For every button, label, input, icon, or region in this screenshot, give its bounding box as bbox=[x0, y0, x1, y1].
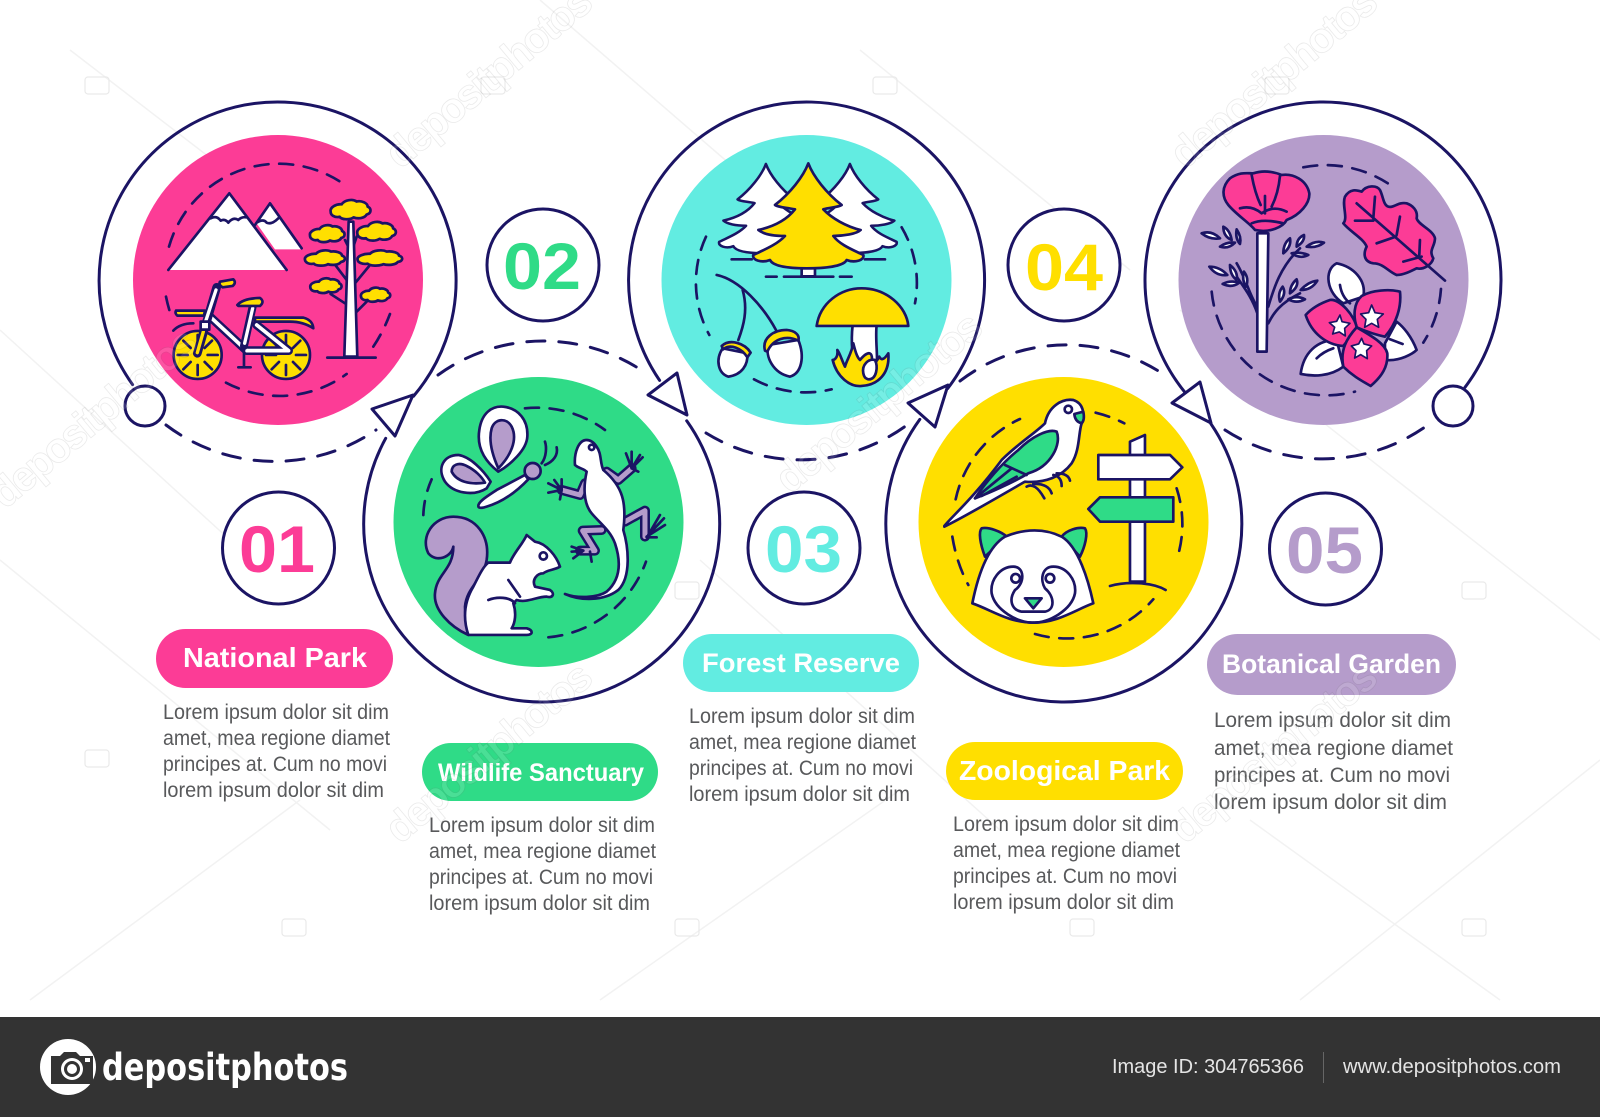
watermark: depositphotos bbox=[376, 652, 601, 852]
footer site url: www.depositphotos.com bbox=[1342, 1056, 1561, 1078]
circle: Zoological Park bbox=[918, 377, 1208, 667]
number badge 01 bbox=[222, 492, 334, 604]
arrow: 4 to 5 bbox=[1172, 382, 1211, 423]
text block: Wildlife Sanctuary: amet, mea regione diamet bbox=[429, 840, 656, 863]
text block: Zoological Park: principes at. Cum no movi bbox=[953, 865, 1177, 888]
text block: Forest Reserve: principes at. Cum no movi bbox=[689, 757, 913, 780]
text block: Forest Reserve: amet, mea regione diamet bbox=[689, 731, 916, 754]
label pill: Forest Reserve: Forest Reserve bbox=[702, 648, 900, 678]
text block: Zoological Park: amet, mea regione diamet bbox=[953, 839, 1180, 862]
text block: Botanical Garden: lorem ipsum dolor sit dim bbox=[1214, 791, 1447, 814]
connector: circle 1 outline and small start node bbox=[99, 102, 456, 461]
text block: National Park: principes at. Cum no movi bbox=[163, 753, 387, 776]
number badge 04 bbox=[1008, 209, 1120, 321]
label pill: Wildlife Sanctuary: Wildlife Sanctuary bbox=[438, 759, 644, 787]
number badge 03: 03 bbox=[765, 512, 842, 586]
number badge 04: 04 bbox=[1025, 230, 1103, 304]
footer bar bbox=[0, 1017, 1600, 1117]
number badge 01: 01 bbox=[239, 512, 315, 586]
icon: national park scene bbox=[166, 164, 402, 396]
label pill: Zoological Park bbox=[946, 742, 1183, 800]
circle: Wildlife Sanctuary bbox=[394, 377, 684, 667]
number badge 05: 05 bbox=[1286, 513, 1363, 587]
circle: Forest Reserve bbox=[662, 135, 952, 425]
watermark: depositphotos bbox=[766, 302, 991, 502]
label pill: National Park: National Park bbox=[183, 642, 367, 673]
label pill: Zoological Park: Zoological Park bbox=[959, 755, 1170, 786]
arrow: 1 to 2 bbox=[372, 395, 413, 436]
text block: National Park: amet, mea regione diamet bbox=[163, 727, 390, 750]
arrow: 3 to 4 bbox=[908, 385, 948, 427]
text block: Forest Reserve: Lorem ipsum dolor sit dim bbox=[689, 705, 915, 728]
text block: Wildlife Sanctuary: lorem ipsum dolor sit dim bbox=[429, 892, 650, 915]
label pill: Botanical Garden: Botanical Garden bbox=[1222, 649, 1441, 679]
icon: zoo scene bbox=[944, 400, 1182, 638]
text block: Zoological Park: lorem ipsum dolor sit dim bbox=[953, 891, 1174, 914]
icon: botanical scene bbox=[1202, 165, 1445, 395]
text block: Wildlife Sanctuary: Lorem ipsum dolor sit dim bbox=[429, 814, 655, 837]
icon: wildlife scene bbox=[423, 407, 665, 637]
label pill: National Park bbox=[156, 629, 393, 688]
text block: Zoological Park bbox=[953, 813, 1180, 914]
text block: Botanical Garden bbox=[1214, 709, 1453, 814]
circle: National Park bbox=[133, 135, 423, 425]
text block: National Park: Lorem ipsum dolor sit dim bbox=[163, 701, 389, 724]
label pill: Wildlife Sanctuary bbox=[422, 743, 658, 801]
label pill: Forest Reserve bbox=[683, 634, 919, 692]
text block: Zoological Park: Lorem ipsum dolor sit dim bbox=[953, 813, 1179, 836]
text block: Botanical Garden: principes at. Cum no movi bbox=[1214, 764, 1450, 787]
text block: Botanical Garden: amet, mea regione diamet bbox=[1214, 737, 1453, 760]
number badge 02: 02 bbox=[503, 229, 581, 303]
watermark bbox=[0, 0, 1386, 852]
number badge 05 bbox=[1270, 493, 1382, 605]
footer image id: Image ID: 304765366 bbox=[1112, 1056, 1304, 1078]
watermark: depositphotos bbox=[1161, 652, 1386, 852]
circle: Botanical Garden bbox=[1178, 135, 1468, 425]
connector: circle 3 outline bbox=[629, 102, 985, 460]
text block: Wildlife Sanctuary bbox=[429, 814, 656, 915]
number badge 02 bbox=[487, 209, 599, 321]
text block: Forest Reserve: lorem ipsum dolor sit dim bbox=[689, 783, 910, 806]
connector: circle 4 outline bbox=[886, 345, 1242, 702]
text block: National Park: lorem ipsum dolor sit dim bbox=[163, 779, 384, 802]
text block: Botanical Garden: Lorem ipsum dolor sit dim bbox=[1214, 709, 1451, 732]
connector: circle 5 outline and small end node bbox=[1145, 102, 1501, 459]
icon: forest scene bbox=[696, 163, 917, 392]
footer logo icon: camera bbox=[40, 1039, 96, 1095]
label pill: Botanical Garden bbox=[1207, 634, 1456, 695]
number badge 03 bbox=[748, 492, 860, 604]
footer logo wordmark: depositphotos bbox=[102, 1046, 348, 1089]
text block: National Park bbox=[163, 701, 390, 802]
text block: Forest Reserve bbox=[689, 705, 916, 806]
text block: Wildlife Sanctuary: principes at. Cum no movi bbox=[429, 866, 653, 889]
connector: circle 2 outline bbox=[364, 341, 720, 702]
arrow: 2 to 3 bbox=[648, 373, 687, 415]
